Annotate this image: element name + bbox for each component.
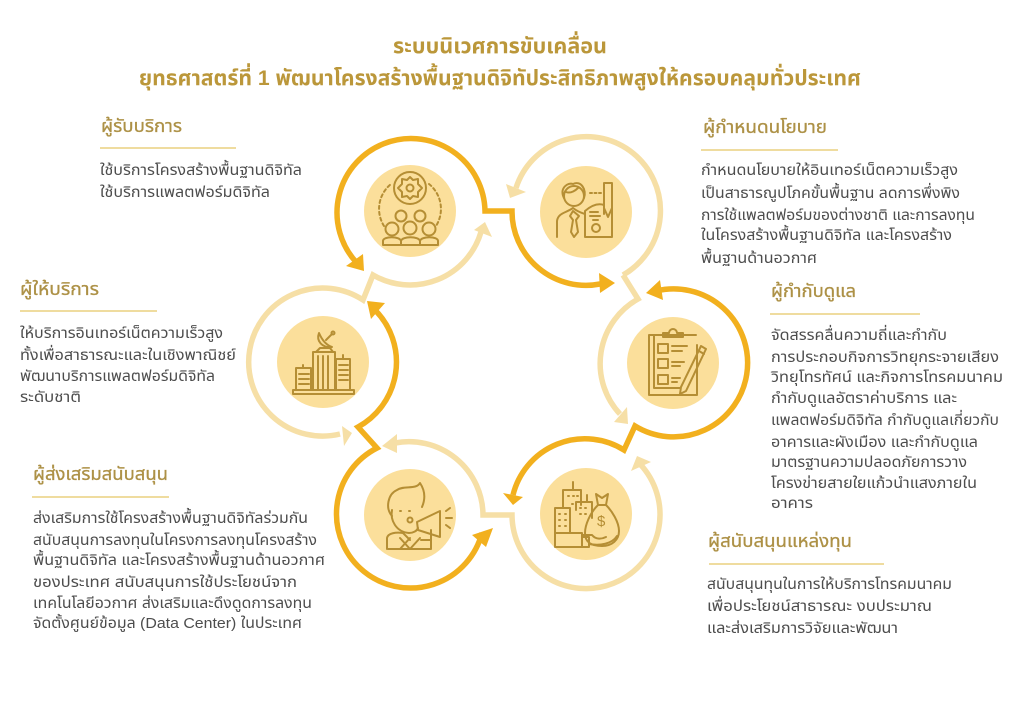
- flow: recipient light arrows: [249, 222, 492, 446]
- body text: [701, 161, 975, 267]
- title: ระบบนิเวศการขับเคลื่อน: [393, 31, 607, 58]
- heading: ผู้กำกับดูแล: [771, 281, 856, 303]
- flow: funding light arrows: [382, 434, 660, 589]
- body text: [100, 159, 302, 201]
- body text: พื้นฐานดิจิทัล และโครงสร้างพื้นฐานด้านอวกาศ: [33, 549, 325, 569]
- panel: regulator: [770, 281, 1003, 512]
- body text: [707, 576, 952, 637]
- body text: ใช้บริการแพลตฟอร์มดิจิทัล: [100, 184, 270, 201]
- flow: promoter to provider dark arrows: [336, 301, 493, 588]
- panel: service recipient: [100, 116, 302, 201]
- icon: regulator clipboard: [627, 317, 719, 409]
- title: [139, 31, 861, 91]
- body text: ส่งเสริมการใช้โครงสร้างพื้นฐานดิจิทัลร่วมกัน: [33, 507, 308, 527]
- body text: [33, 507, 325, 632]
- panel: promoter and supporter: [32, 464, 325, 632]
- body text: [770, 324, 1003, 512]
- body text: เป็นสาธารณูปโภคขั้นพื้นฐาน ลดการพึ่งพิง: [701, 182, 960, 202]
- body text: โครงข่ายสายใยแก้วนำแสงภายใน: [771, 474, 977, 492]
- body text: เพื่อประโยชน์สาธารณะ งบประมาณ: [707, 595, 932, 615]
- body text: อาคาร: [771, 495, 813, 512]
- body text: จัดสรรคลื่นความถี่และกำกับ: [771, 324, 947, 344]
- heading: ผู้ส่งเสริมสนับสนุน: [33, 464, 168, 486]
- heading: ผู้รับบริการ: [101, 116, 182, 138]
- icon: promoter with megaphone: [364, 469, 456, 561]
- flow: recipient to policy dark arrows: [337, 139, 615, 293]
- body text: เทคโนโลยีอวกาศ ส่งเสริมและดึงดูดการลงทุน: [33, 594, 312, 612]
- dollar sign: $: [597, 513, 606, 530]
- body text: ทั้งเพื่อสาธารณะและในเชิงพาณิชย์: [20, 344, 236, 364]
- flow: policy maker light arrows: [506, 137, 660, 424]
- body text: การประกอบกิจการวิทยุกระจายเสียง: [771, 349, 999, 366]
- flow: regulator to funding dark arrows: [503, 280, 748, 505]
- cycle diagram: [249, 137, 748, 589]
- body text: พัฒนาบริการแพลตฟอร์มดิจิทัล: [20, 368, 215, 385]
- body text: มาตรฐานความปลอดภัยการวาง: [771, 454, 967, 471]
- body text: กำหนดนโยบายให้อินเทอร์เน็ตความเร็วสูง: [701, 161, 958, 179]
- panel: funding supporter: [707, 531, 952, 637]
- heading: ผู้สนับสนุนแหล่งทุน: [708, 531, 852, 553]
- body text: วิทยุโทรทัศน์ และกิจการโทรคมนาคม: [770, 369, 1003, 386]
- body text: [20, 324, 236, 406]
- body text: กำกับดูแลอัตราค่าบริการ และ: [771, 389, 957, 407]
- body text: สนับสนุนการลงทุนในโครงการลงทุนโครงสร้าง: [33, 532, 317, 549]
- body text: จัดตั้งศูนย์ข้อมูล (Data Center) ในประเทศ: [33, 613, 302, 632]
- body text: สนับสนุนทุนในการให้บริการโทรคมนาคม: [707, 576, 952, 593]
- icon: funding buildings and money bag: [540, 468, 632, 560]
- body text: แพลตฟอร์มดิจิทัล กำกับดูแลเกี่ยวกับ: [771, 409, 999, 429]
- panel: policy maker: [701, 117, 975, 267]
- body text: ให้บริการอินเทอร์เน็ตความเร็วสูง: [20, 324, 223, 342]
- panel: service provider: [20, 279, 236, 406]
- icon: service recipients: [364, 165, 456, 257]
- body text: อาคารและผังเมือง และกำกับดูแล: [771, 434, 978, 451]
- icon: provider buildings with satellite dish: [277, 316, 369, 408]
- body text: ของประเทศ สนับสนุนการใช้ประโยชน์จาก: [33, 574, 297, 591]
- heading: ผู้ให้บริการ: [20, 279, 99, 301]
- icon: policy maker: [540, 166, 632, 258]
- body text: พื้นฐานด้านอวกาศ: [701, 247, 817, 267]
- body text: ระดับชาติ: [20, 389, 81, 406]
- body text: และส่งเสริมการวิจัยและพัฒนา: [707, 619, 898, 637]
- title: ยุทธศาสตร์ที่ 1 พัฒนาโครงสร้างพื้นฐานดิจิทัประสิทธิภาพสูงให้ครอบคลุมทั่วประเทศ: [139, 63, 861, 91]
- body text: ในโครงสร้างพื้นฐานดิจิทัล และโครงสร้าง: [701, 224, 952, 244]
- heading: ผู้กำหนดนโยบาย: [703, 117, 827, 139]
- body text: ใช้บริการโครงสร้างพื้นฐานดิจิทัล: [100, 159, 302, 179]
- body text: การใช้แพลตฟอร์มของต่างชาติ และการลงทุน: [701, 206, 975, 224]
